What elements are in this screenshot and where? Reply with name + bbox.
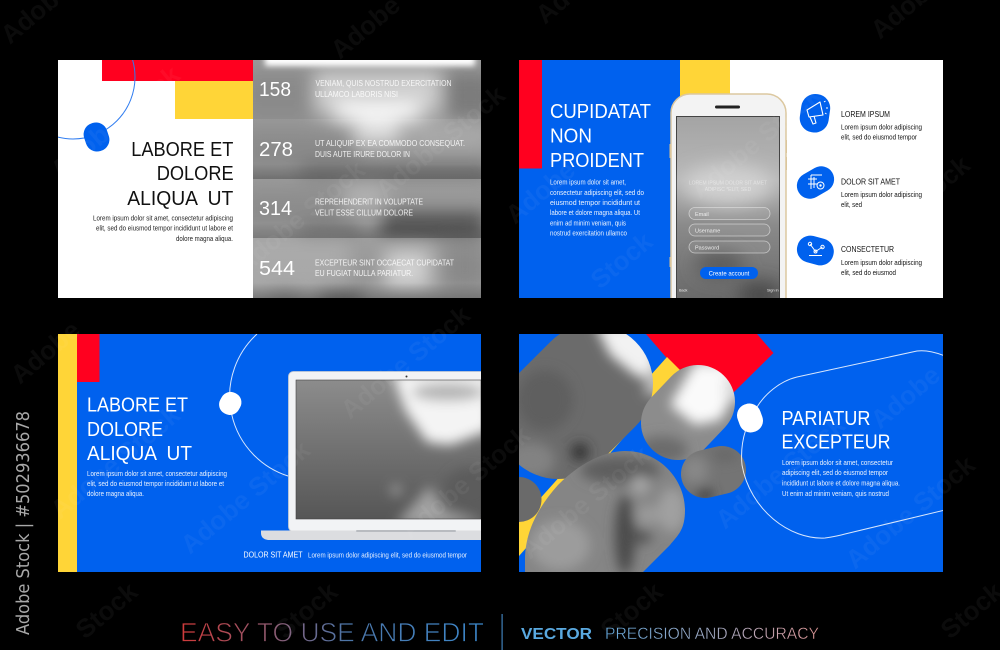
row numbers — [259, 79, 295, 280]
yellow block — [680, 60, 730, 100]
create account button — [700, 267, 758, 279]
panel: labore et with laptop — [58, 334, 500, 572]
body text: labore et dolore magna aliqua. Ut — [550, 208, 640, 217]
body text: dolore magna aliqua. — [87, 489, 144, 498]
watermarks: Adobe Stock — [370, 79, 511, 205]
heading: DOLORE — [157, 162, 234, 185]
laptop screen — [296, 372, 495, 525]
heading: ALIQUA UT — [127, 187, 234, 210]
blurred photo rows — [253, 60, 481, 298]
body text: Lorem ipsum dolor sit amet, consectetur adipiscing — [93, 214, 233, 222]
phone mockup — [670, 93, 787, 298]
watermarks: Adobe — [5, 315, 86, 390]
red block — [102, 60, 253, 81]
email input — [689, 208, 770, 220]
heading: NON — [550, 124, 592, 148]
icon: settings list — [796, 166, 834, 199]
item text: consectetur: CONSECTETUR — [841, 245, 894, 254]
body text — [782, 458, 900, 498]
heading: CUPIDATAT — [550, 100, 651, 123]
watermarks: Stock — [70, 576, 144, 645]
photo pill: large — [490, 320, 670, 490]
item text: dolor sit amet: DOLOR SIT AMET — [841, 178, 900, 186]
body text: Ut enim ad minim veniam, quis nostrud — [782, 489, 889, 498]
top white haze — [261, 60, 479, 70]
photo circle: left edge — [496, 477, 542, 522]
caption — [244, 550, 467, 560]
row numbers: 158 — [259, 79, 291, 101]
row numbers: 278 — [259, 139, 293, 161]
watermarks: Adobe Stock — [230, 154, 371, 280]
email input: Email — [695, 212, 709, 218]
heading — [87, 394, 192, 465]
panel: cupidatat with phone — [519, 60, 943, 324]
panel: pariatur excepteur — [490, 320, 945, 585]
screen footer links: Sign in — [767, 288, 779, 292]
item text: dolor sit amet: elit, sed — [841, 200, 862, 209]
watermarks: Adobe Stock — [45, 399, 186, 525]
laptop mockup — [261, 372, 500, 540]
footer label: vector: VECTOR — [521, 626, 592, 643]
heading: ALIQUA UT — [87, 442, 192, 465]
body text: nostrud exercitation ullamco — [550, 228, 627, 238]
watermarks: Adobe Stock — [175, 434, 316, 560]
heading: PARIATUR — [782, 407, 870, 430]
create account button: Create account — [709, 272, 750, 278]
red block — [519, 60, 542, 168]
body text: adipiscing elit, sed do eiusmod tempor — [782, 468, 888, 477]
body text: Lorem ipsum dolor sit amet, consectetur — [782, 458, 893, 467]
username input: Username — [695, 228, 720, 234]
heading — [550, 104, 651, 167]
watermarks: Adobe Stock — [685, 79, 826, 205]
watermarks: Stock — [595, 576, 669, 645]
heading: EXCEPTEUR — [782, 430, 890, 454]
body text — [550, 178, 644, 238]
screen footer links — [679, 289, 778, 292]
body text — [93, 214, 233, 243]
heading: DOLORE — [87, 418, 163, 441]
watermarks: Adobe Stock — [840, 449, 981, 575]
row captions: VELIT ESSE CILLUM DOLORE — [315, 208, 413, 218]
watermarks: Adobe Stock — [335, 299, 476, 425]
white blob — [734, 400, 766, 436]
icon: megaphone — [800, 94, 830, 132]
body text: eiusmod tempor incididunt ut — [550, 198, 640, 207]
item text: lorem ipsum: Lorem ipsum dolor adipiscing — [841, 122, 922, 132]
heading — [782, 407, 890, 454]
row numbers: 314 — [259, 198, 292, 220]
body text: Lorem ipsum dolor sit amet, consectetur adipiscing — [87, 469, 227, 478]
watermarks: Adobe Stock — [515, 439, 656, 565]
caption: DOLOR SIT AMET — [244, 550, 303, 560]
body text — [87, 469, 227, 498]
item text: lorem ipsum — [841, 110, 922, 142]
heading: LABORE ET — [87, 394, 188, 416]
body text: elit, sed do eiusmod tempor incididunt ut labore et — [87, 479, 224, 488]
thin white loop line — [742, 351, 945, 538]
item text: dolor sit amet — [841, 178, 922, 209]
item text: lorem ipsum: elit, sed do eiusmod tempor — [841, 132, 917, 142]
screen heading: ADIPISC *ELIT, SED — [705, 187, 752, 193]
body text: elit, sed do eiusmod tempor incididunt ut labore et — [96, 224, 233, 232]
screen footer links: Back — [679, 288, 688, 292]
panel: labore et dolore with numbered rows — [58, 60, 481, 298]
item text: lorem ipsum: LOREM IPSUM — [841, 110, 890, 119]
icon: line chart — [796, 236, 834, 266]
watermarks: Adobe — [500, 155, 581, 230]
body text: dolore magna aliqua. — [176, 234, 233, 243]
row captions: REPREHENDERIT IN VOLUPTATE — [315, 198, 423, 206]
yellow block — [175, 81, 253, 119]
row captions: VENIAM, QUIS NOSTRUD EXERCITATION — [316, 79, 452, 88]
watermarks: Adobe Stock — [45, 59, 186, 185]
watermarks: Adobe Stock — [395, 419, 536, 545]
heading — [127, 138, 234, 210]
blue blob — [84, 122, 110, 152]
body text: incididunt ut labore et dolore magna aliqua. — [782, 478, 900, 488]
footer divider — [502, 614, 503, 650]
password input — [689, 241, 770, 253]
item text: consectetur: elit, sed do eiusmod — [841, 268, 896, 277]
screen heading: LOREM IPSUM DOLOR SIT AMET — [689, 180, 767, 186]
photo pill: small — [675, 440, 755, 505]
photo pill: silver — [630, 355, 745, 470]
caption: Lorem ipsum dolor adipiscing elit, sed do eiusmod tempor — [308, 550, 467, 560]
white blob — [219, 392, 242, 415]
body text: enim ad minim veniam, quis — [550, 218, 626, 228]
blue area — [519, 60, 680, 298]
watermarks: Adobe Stock — [710, 409, 851, 535]
row captions — [315, 79, 465, 278]
row captions: ULLAMCO LABORIS NISI — [315, 90, 398, 99]
item text: consectetur: Lorem ipsum dolor adipiscing — [841, 258, 922, 267]
body text: consectetur adipiscing elit, sed do — [550, 188, 644, 197]
row captions: EU FUGIAT NULLA PARIATUR. — [315, 269, 413, 278]
row captions: UT ALIQUIP EX EA COMMODO CONSEQUAT. — [315, 139, 465, 148]
red block — [77, 334, 100, 382]
body text: Lorem ipsum dolor sit amet, — [550, 178, 626, 186]
heading: LABORE ET — [131, 138, 234, 161]
watermarks: Adobe — [865, 360, 946, 435]
item text: consectetur — [841, 245, 922, 277]
footer tagline: precision: PRECISION AND ACCURACY — [605, 625, 819, 643]
watermarks: Adobe Stock — [835, 149, 976, 275]
yellow stripe — [58, 334, 77, 572]
thin blue circle line — [58, 60, 136, 140]
row captions: EXCEPTEUR SINT OCCAECAT CUPIDATAT — [315, 258, 454, 268]
footer tagline: easy to use: EASY TO USE AND EDIT — [180, 618, 484, 648]
yellow diagonal band — [519, 357, 682, 556]
row captions: DUIS AUTE IRURE DOLOR IN — [315, 150, 410, 159]
stock id side label: Adobe Stock | #502936678 — [14, 411, 34, 635]
photo pill: bottom — [500, 445, 700, 585]
username input — [689, 224, 770, 236]
password input: Password — [695, 246, 719, 252]
heading: PROIDENT — [550, 149, 644, 172]
red diamond — [646, 334, 774, 393]
row numbers: 544 — [259, 258, 295, 280]
item text: dolor sit amet: Lorem ipsum dolor adipiscing — [841, 190, 922, 199]
screen heading — [689, 180, 767, 192]
watermarks: Stock — [270, 576, 344, 645]
phone screen — [677, 117, 782, 309]
thin white arc line — [230, 334, 288, 476]
watermarks: Stock — [585, 226, 659, 295]
